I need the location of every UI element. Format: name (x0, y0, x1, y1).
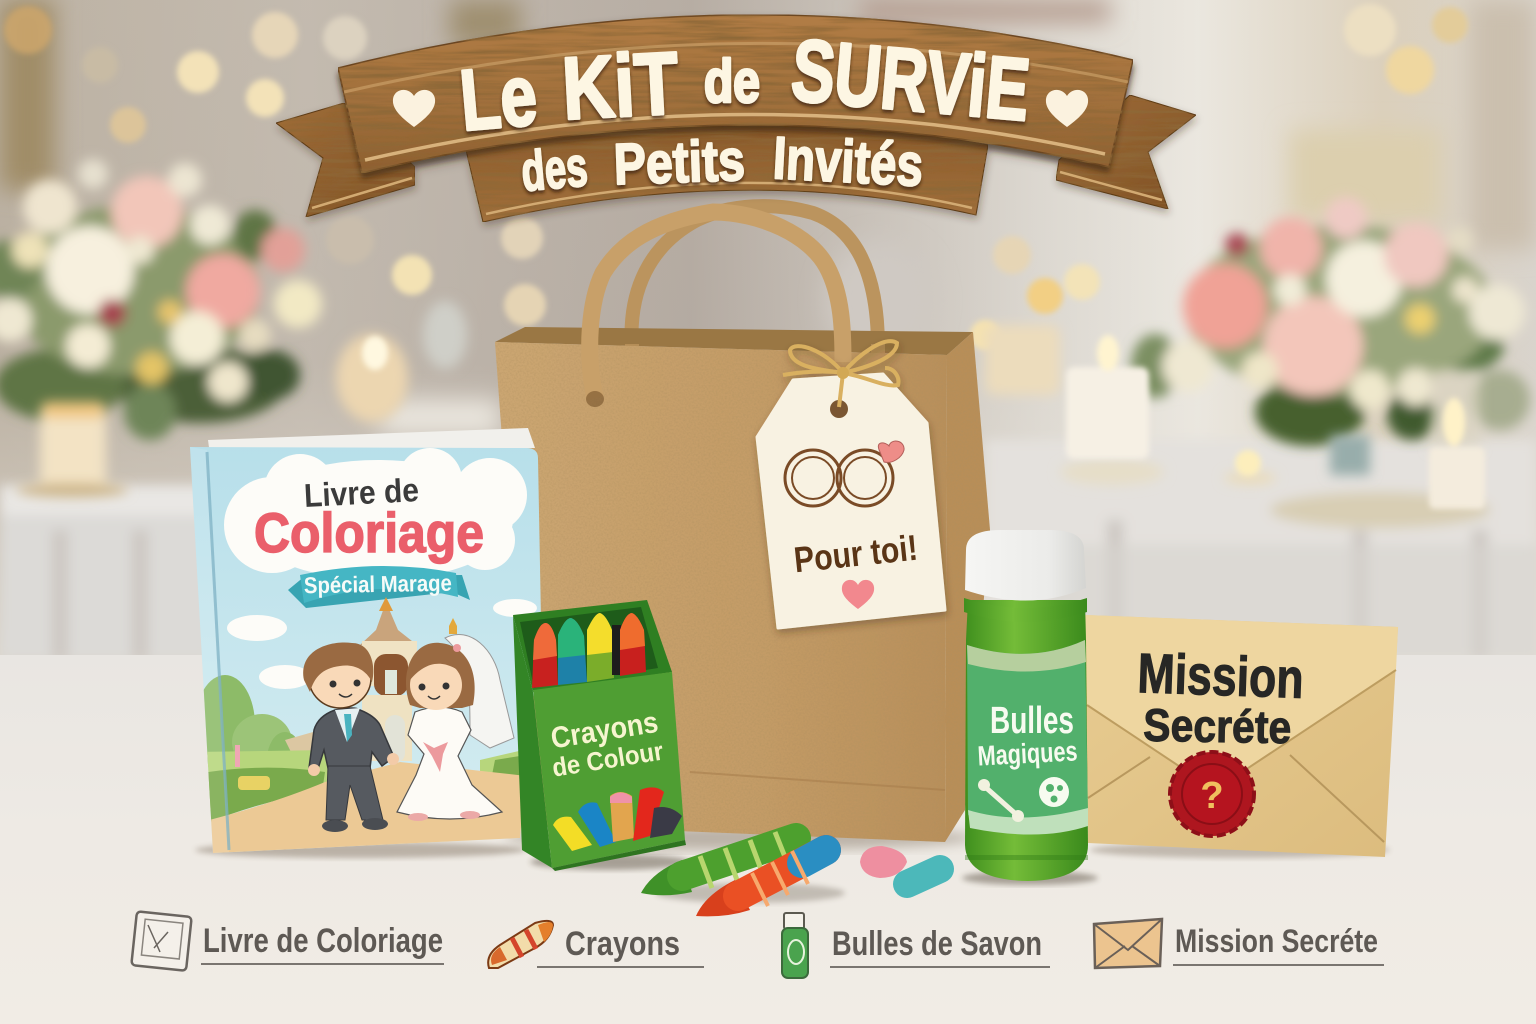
envelope title (1137, 641, 1305, 753)
left flowers (0, 159, 322, 440)
icon: hearts (393, 90, 435, 127)
erasers (860, 846, 907, 878)
right flowers (1131, 197, 1530, 446)
box label (549, 706, 665, 783)
banner title (456, 20, 1034, 203)
groom (303, 642, 399, 832)
bottle label: Magiques (977, 735, 1078, 772)
ribbon tail left (276, 103, 415, 217)
crayons in box (532, 613, 646, 688)
candles (16, 301, 1485, 509)
envelope title: Mission (1137, 641, 1305, 710)
icon: wedding rings (785, 441, 904, 506)
wooden banner (276, 15, 1196, 222)
green crayon (641, 832, 796, 895)
kraft gift bag (495, 206, 990, 850)
plank shadow (338, 21, 1133, 179)
book title: Coloriage (254, 501, 484, 564)
legend (131, 911, 1384, 978)
back handle (632, 206, 878, 348)
envelope (1085, 615, 1398, 858)
box label: de Colour (550, 736, 665, 783)
pastel sticks (553, 787, 682, 851)
box label: Crayons (549, 706, 660, 755)
legend: crayons (488, 921, 704, 968)
background: blurred wedding reception (0, 0, 1536, 660)
banner title: Petits (613, 128, 746, 197)
ribbon: special mariage (288, 566, 470, 608)
banner title: des (519, 134, 590, 203)
banner title: de (704, 48, 760, 115)
background tables (0, 440, 1536, 660)
bottle label: Bulles (990, 700, 1074, 742)
book title (254, 471, 484, 564)
wax seal (1170, 752, 1254, 836)
front handle (590, 212, 843, 398)
crayon box (513, 600, 690, 871)
banner title: Le (456, 47, 541, 149)
bride (397, 634, 514, 821)
book cover art (185, 440, 545, 860)
bottle label (967, 640, 1088, 835)
icon: heart (842, 580, 874, 609)
envelope title: Secréte (1143, 699, 1292, 753)
tag text: Pour toi! (792, 527, 920, 580)
wax seal: ? (1200, 775, 1224, 817)
colouring book (185, 428, 545, 860)
bottle cap (965, 530, 1086, 601)
cover cloud (224, 448, 537, 689)
gift tag (757, 341, 945, 628)
foreground tablecloth (0, 655, 1536, 1024)
bokeh lights (4, 4, 1468, 350)
banner title: SURViE (788, 20, 1034, 139)
lower plank (466, 100, 988, 222)
legend: livre de coloriage: Livre de Coloriage (203, 922, 443, 960)
orange crayon (696, 850, 826, 916)
box side (513, 615, 552, 868)
banner title: Invités (771, 124, 925, 199)
church (360, 597, 457, 763)
main arch plank (338, 15, 1133, 173)
legend: bulles de savon (782, 913, 1050, 978)
book title: Livre de (303, 471, 420, 514)
bubble bottle (962, 530, 1098, 885)
legend: mission secrete: Mission Secréte (1175, 923, 1378, 959)
legend: mission secrete (1094, 919, 1384, 968)
back handle feet (632, 344, 878, 358)
ribbon tail right (1056, 95, 1196, 209)
loose crayons (641, 832, 940, 916)
banner title: KiT (560, 33, 681, 138)
ribbon: special mariage: Spécial Marage (304, 570, 452, 598)
legend: bulles de savon: Bulles de Savon (832, 925, 1042, 963)
legend: livre de coloriage (131, 911, 444, 971)
legend: crayons: Crayons (565, 925, 680, 963)
